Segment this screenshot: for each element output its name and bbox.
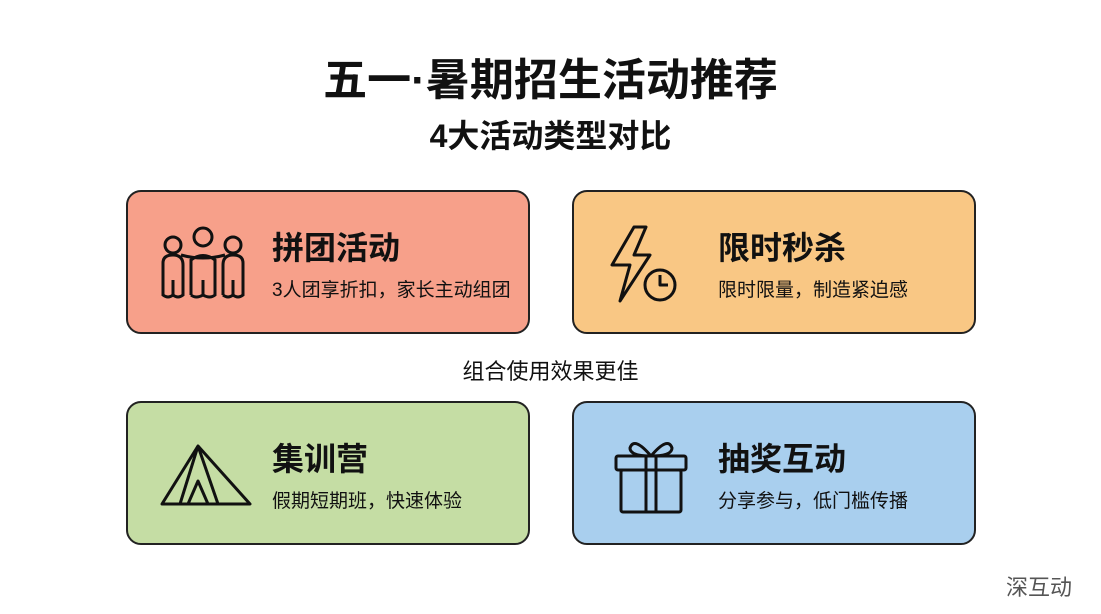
panel: lottery: 抽奖互动 (718, 441, 846, 477)
subtitle: 4大活动类型对比 (430, 118, 671, 154)
panel: camp: 假期短期班，快速体验 (272, 491, 462, 512)
panel: flash sale: 限时限量，制造紧迫感 (718, 280, 908, 301)
panel: lottery (572, 401, 976, 545)
title: 五一·暑期招生活动推荐 (323, 56, 778, 105)
icon: tent (160, 444, 252, 506)
panel: flash sale (572, 190, 976, 334)
panel: lottery: 分享参与，低门槛传播 (718, 491, 908, 512)
panel: group buy: 3人团享折扣，家长主动组团 (272, 280, 511, 301)
middle text: 组合使用效果更佳 (462, 359, 638, 384)
panel: group buy: 拼团活动 (272, 230, 400, 266)
panel: group buy (126, 190, 530, 334)
panel: camp (126, 401, 530, 545)
icon: people (162, 226, 244, 298)
panel: flash sale: 限时秒杀 (718, 230, 846, 266)
watermark: 深互动 (1006, 575, 1072, 600)
panel: camp: 集训营 (272, 441, 368, 477)
icon: gift (614, 442, 688, 514)
icon: lightning clock (610, 226, 676, 302)
